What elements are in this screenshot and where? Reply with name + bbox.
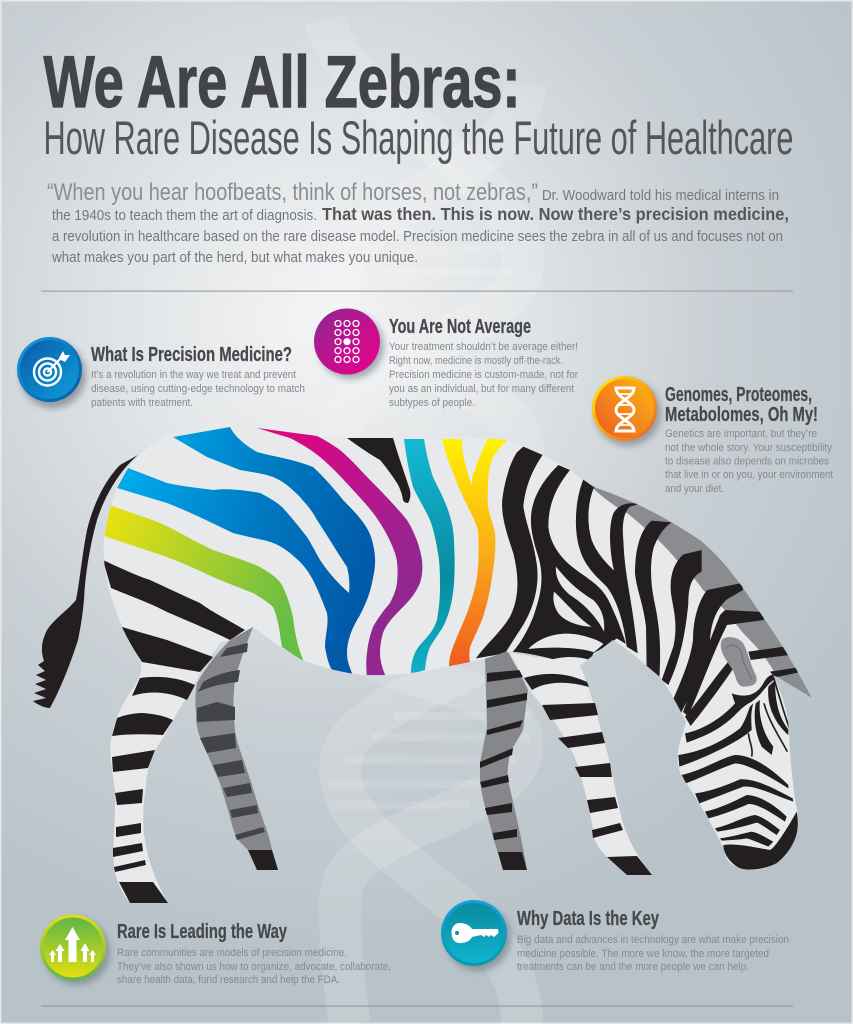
back white leg <box>110 630 230 903</box>
body text: Big data and advances in technology are what make precision <box>517 934 789 946</box>
DNA helix watermark <box>325 20 530 1024</box>
body text <box>117 947 391 986</box>
body text: treatments can be and the more people we can help. <box>517 961 749 973</box>
section: genomes <box>592 376 833 495</box>
teal stripe <box>404 439 455 674</box>
intro paragraph: “When you hear hoofbeats, think of horses, not zebras,” <box>47 179 538 206</box>
intro paragraph: the 1940s to teach them the art of diagnosis. <box>52 208 317 224</box>
front white leg <box>510 653 652 875</box>
section: you are not average <box>314 308 578 409</box>
zebra body <box>104 427 812 870</box>
body text: Precision medicine is custom-made, not for <box>389 369 578 381</box>
green stripe <box>104 505 304 662</box>
mane <box>587 483 812 698</box>
body text: It’s a revolution in the way we treat and prevent <box>91 369 296 381</box>
section: why data is the key <box>441 900 789 973</box>
back grey leg <box>195 627 278 870</box>
ear <box>721 637 757 687</box>
body text: share health data, fund research and help the FDA. <box>117 974 340 986</box>
intro paragraph: what makes you part of the herd, but what makes you unique. <box>51 250 418 266</box>
body text <box>389 341 578 409</box>
body text: They’ve also shown us how to organize, advocate, collaborate, <box>117 961 391 973</box>
heading: Rare Is Leading the Way <box>117 921 288 943</box>
body text <box>517 934 789 973</box>
heading <box>665 384 818 426</box>
body text: Rare communities are models of precision medicine. <box>117 947 347 959</box>
zebra <box>33 427 812 903</box>
body text: Your treatment shouldn’t be average either! <box>389 341 578 353</box>
body text: medicine possible. The more we know, the more targeted <box>517 948 769 960</box>
section: rare is leading the way <box>40 914 391 986</box>
intro paragraph: That was then. This is now. Now there’s precision medicine, <box>322 204 789 224</box>
magenta stripe <box>257 428 422 677</box>
body text: you as an individual, but for many different <box>389 383 574 395</box>
yellow-orange stripe <box>442 438 507 667</box>
shoulder and neck stripes <box>673 583 764 716</box>
icon: dot grid <box>314 308 384 379</box>
front grey leg <box>480 649 528 870</box>
intro paragraph <box>47 179 789 266</box>
body text: subtypes of people. <box>389 397 475 409</box>
tail <box>33 455 138 708</box>
heading: You Are Not Average <box>389 316 531 338</box>
icon: key <box>441 900 511 971</box>
body text: Genetics are important, but they’re <box>665 428 817 440</box>
body text: Right now, medicine is mostly off-the-rack. <box>389 355 563 367</box>
intro paragraph: Dr. Woodward told his medical interns in <box>542 188 779 204</box>
title: We Are All Zebras: <box>44 42 520 123</box>
section: what is precision medicine <box>17 337 305 409</box>
blue stripe <box>117 427 375 678</box>
heading: What Is Precision Medicine? <box>91 344 292 366</box>
head stripes <box>678 637 798 870</box>
body text <box>91 369 305 409</box>
body text: patients with treatment. <box>91 397 193 409</box>
intro paragraph: a revolution in healthcare based on the rare disease model. Precision medicine sees the zebra in all of us and focuses not on <box>52 229 783 245</box>
heading: Why Data Is the Key <box>517 908 660 930</box>
neck stripes <box>476 447 702 685</box>
black rear stripes <box>103 560 245 640</box>
body text: and your diet. <box>665 483 724 495</box>
icon: target <box>17 337 86 408</box>
body text: to disease also depends on microbes <box>665 456 829 468</box>
body text: disease, using cutting-edge technology to match <box>91 383 305 395</box>
icon: arrows <box>40 914 110 985</box>
body text <box>665 428 833 495</box>
body text: not the whole story. Your susceptibility <box>665 442 832 454</box>
body text: that live in or on you, your environment <box>665 469 833 481</box>
black wedge stripe <box>347 438 410 503</box>
coloured and black body stripes <box>103 427 812 870</box>
icon: dna <box>592 376 661 446</box>
rear hip stripe over leg <box>122 627 213 672</box>
